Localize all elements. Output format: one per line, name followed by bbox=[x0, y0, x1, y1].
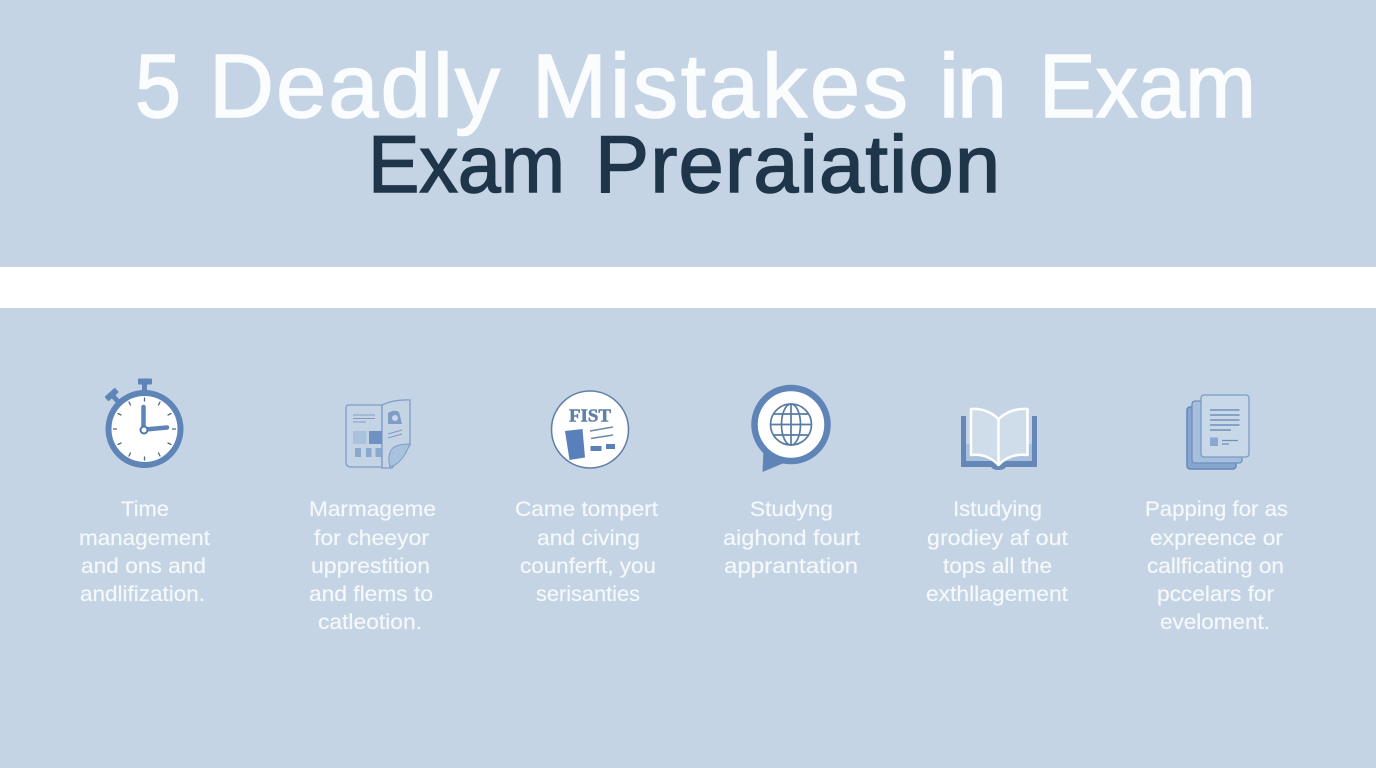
icon: FIST badge bbox=[552, 391, 628, 468]
icon: globe speech bubble bbox=[754, 388, 828, 472]
icon: open magazine bbox=[346, 400, 410, 468]
text: column 6: expreence or bbox=[1150, 527, 1283, 550]
title: Preraiation bbox=[595, 120, 1000, 210]
text: column 6: eveloment. bbox=[1160, 611, 1270, 634]
text: column 5: exthllagement bbox=[926, 583, 1068, 606]
icon: stack of papers bbox=[1187, 395, 1249, 469]
text: column 2: for cheeyor bbox=[314, 527, 429, 550]
text: column 1: andlifization. bbox=[80, 583, 205, 606]
text: column 4: aighond fourt bbox=[723, 527, 860, 550]
panel: column 2 bbox=[309, 400, 436, 634]
text: column 3: Came tompert bbox=[515, 498, 658, 521]
text: column 2 bbox=[309, 498, 436, 634]
text: column 4: apprantation bbox=[724, 555, 858, 578]
text: column 5 bbox=[926, 498, 1068, 606]
text: column 6: pccelars for bbox=[1157, 583, 1274, 606]
panel: column 5 bbox=[926, 409, 1068, 606]
text: column 6: callficating on bbox=[1147, 555, 1284, 578]
panel: column 6 bbox=[1145, 395, 1288, 634]
text: column 6 bbox=[1145, 498, 1288, 634]
title bbox=[135, 37, 1256, 210]
text: column 1: management bbox=[79, 527, 210, 550]
text: column 3: counferft, you bbox=[520, 555, 656, 578]
title: 5 bbox=[135, 37, 181, 137]
icon: stopwatch bbox=[104, 378, 180, 465]
icon: FIST badge: FIST bbox=[569, 406, 611, 426]
text: column 2: catleotion. bbox=[318, 611, 422, 634]
text: column 5: tops all the bbox=[943, 555, 1052, 578]
title: Deadly bbox=[209, 37, 500, 137]
panel: column 4 bbox=[723, 388, 860, 578]
text: column 4: Studyng bbox=[750, 498, 833, 521]
text: column 2: Marmageme bbox=[309, 498, 436, 521]
text: column 6: Papping for as bbox=[1145, 498, 1288, 521]
text: column 2: and flems to bbox=[309, 583, 433, 606]
text: column 5: Istudying bbox=[953, 498, 1042, 521]
text: column 4 bbox=[723, 498, 860, 578]
panel: column 1 time management bbox=[79, 378, 210, 606]
title: Mistakes bbox=[532, 37, 908, 137]
text: column 3 bbox=[515, 498, 658, 606]
title: Exam bbox=[1039, 37, 1256, 137]
title: Exam bbox=[368, 120, 565, 210]
icon: open book bbox=[961, 409, 1037, 470]
text: column 2: upprestition bbox=[311, 555, 430, 578]
text: column 1: Time bbox=[121, 498, 169, 521]
text: column 1: and ons and bbox=[81, 555, 206, 578]
text: column 1 bbox=[79, 498, 210, 606]
text: column 5: grodiey af out bbox=[927, 527, 1068, 550]
title: in bbox=[939, 37, 1007, 137]
text: column 3: serisanties bbox=[536, 583, 640, 606]
text: column 3: and civing bbox=[537, 527, 640, 550]
panel: column 3 bbox=[515, 391, 658, 606]
white divider band bbox=[0, 267, 1376, 308]
